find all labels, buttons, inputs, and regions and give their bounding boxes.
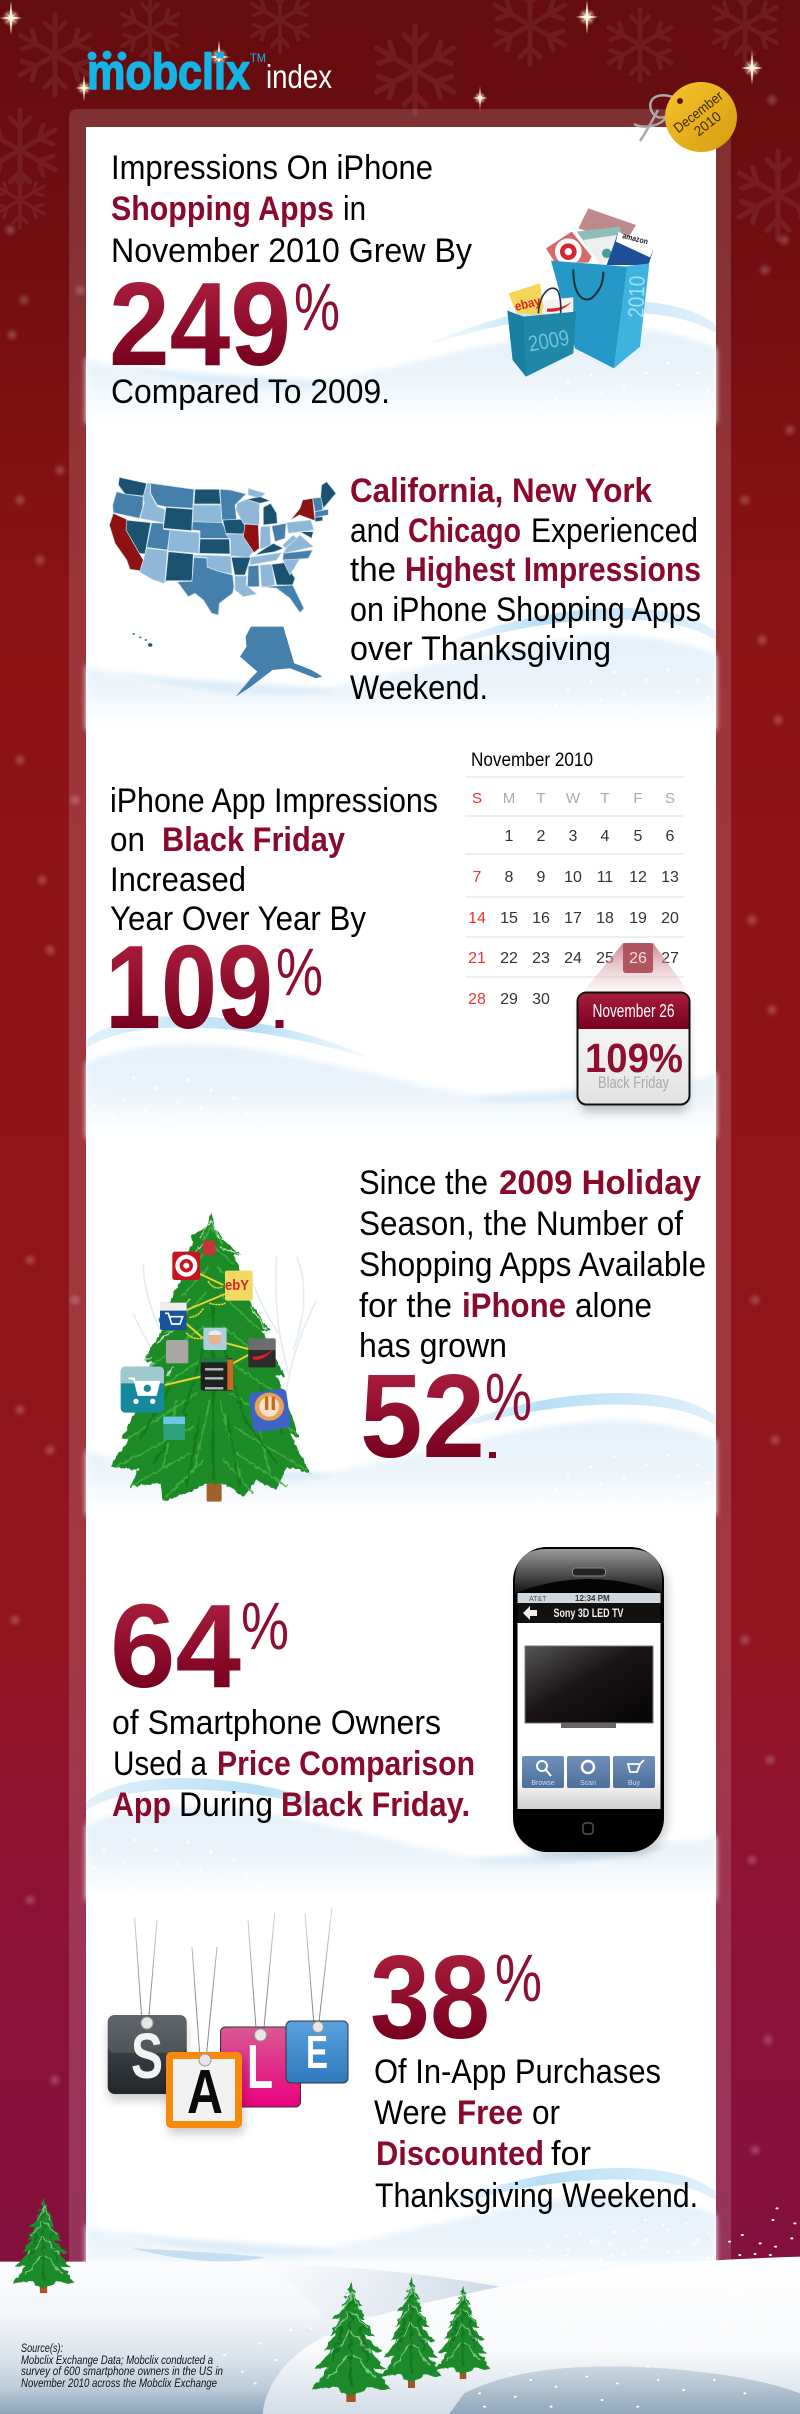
section 6 text: 38% in-app purchases: Thanksgiving Weekend. xyxy=(375,2177,698,2215)
phone: price comparison app: Sony 3D LED TV xyxy=(554,1606,624,1620)
calendar: November 2010: 21 xyxy=(468,950,486,967)
section 5 text: 64% price comparison: During xyxy=(179,1786,273,1824)
calendar: November 2010: 14 xyxy=(468,910,486,927)
callout: November 26 109% Black Friday: Black Friday xyxy=(598,1073,669,1092)
calendar: November 2010: 29 xyxy=(500,991,518,1008)
icon: SALE hanging tags: L xyxy=(247,2033,273,2102)
section 6 text: 38% in-app purchases: Free xyxy=(457,2094,523,2132)
section 5 text: 64% price comparison: % xyxy=(241,1589,289,1664)
section 4 text: 52% apps growth xyxy=(359,1164,706,1483)
phone: price comparison app: 12:34 PM xyxy=(575,1594,610,1603)
section 5 text: 64% price comparison: of Smartphone Owners xyxy=(112,1704,441,1742)
section 3 text: Black Friday 109%: Increased xyxy=(110,861,246,899)
calendar: November 2010: W xyxy=(566,790,581,807)
section 2 text: top states xyxy=(350,472,701,707)
tag: December 2010 xyxy=(634,82,737,152)
label: ebay ornament: ebY xyxy=(225,1277,249,1294)
section 4 text: 52% apps growth: Season, the Number of xyxy=(359,1205,684,1243)
section 3 text: Black Friday 109%: 109 xyxy=(105,921,273,1054)
panel frame xyxy=(69,109,731,2280)
map: United States xyxy=(109,477,336,697)
calendar: November 2010: 27 xyxy=(661,950,679,967)
section 5 text: 64% price comparison: Black Friday. xyxy=(281,1786,470,1824)
section 3 text: Black Friday 109%: on xyxy=(110,821,145,859)
callout: November 26 109% Black Friday: November 26 xyxy=(592,1001,674,1021)
section 4 text: 52% apps growth: 52 xyxy=(360,1350,485,1483)
calendar: November 2010: 13 xyxy=(661,869,679,886)
calendar: November 2010: F xyxy=(633,790,643,807)
section 4 text: 52% apps growth: iPhone xyxy=(462,1287,566,1325)
calendar: November 2010: 16 xyxy=(532,910,550,927)
icon: shopping bags xyxy=(507,208,653,377)
calendar: November 2010: 17 xyxy=(564,910,582,927)
tag: December 2010: December xyxy=(670,87,726,136)
icon: SALE hanging tags xyxy=(108,1907,348,2134)
section 3 text: Black Friday 109% xyxy=(105,782,438,1054)
section 1 text: impressions 249%: Shopping Apps xyxy=(111,190,334,228)
source note: Mobclix Exchange Data; Mobclix conducted a xyxy=(21,2355,213,2367)
section 2 text: top states: California, New York xyxy=(350,472,652,510)
section 6 text: 38% in-app purchases: Were xyxy=(374,2094,447,2132)
icon: shopping bags: ebay xyxy=(513,293,543,314)
section 4 text: 52% apps growth: % xyxy=(485,1360,532,1435)
section 5 text: 64% price comparison: App xyxy=(112,1786,171,1824)
source note: Source(s): xyxy=(21,2343,63,2355)
section 2 text: top states: over Thanksgiving xyxy=(350,630,611,668)
section 5 text: 64% price comparison: 64 xyxy=(110,1580,241,1713)
calendar: November 2010: 10 xyxy=(564,869,582,886)
section 1 text: impressions 249%: Compared To 2009. xyxy=(111,373,390,411)
calendar: November 2010: 7 xyxy=(473,869,482,886)
calendar: November 2010: 8 xyxy=(505,869,514,886)
calendar: November 2010: 22 xyxy=(500,950,518,967)
section 6 text: 38% in-app purchases xyxy=(370,1931,698,2215)
calendar: November 2010 xyxy=(466,750,689,1008)
section 1 text: impressions 249%: in xyxy=(343,190,366,228)
calendar: November 2010: November 2010 xyxy=(471,750,593,771)
logo: mobclix index: index xyxy=(266,58,332,95)
phone: price comparison app: Scan xyxy=(580,1780,596,1787)
calendar: November 2010: 3 xyxy=(569,828,578,845)
icon: shopping bags: 2009 xyxy=(526,325,571,356)
calendar: November 2010: S xyxy=(472,790,482,807)
section 1 text: impressions 249%: November 2010 Grew By xyxy=(111,232,472,270)
snow waves xyxy=(86,301,716,2290)
section 6 text: 38% in-app purchases: % xyxy=(495,1941,542,2016)
section 4 text: 52% apps growth: has grown xyxy=(359,1327,507,1365)
calendar: November 2010: 23 xyxy=(532,950,550,967)
section 1 text: impressions 249% xyxy=(109,149,472,411)
section 6 text: 38% in-app purchases: Of In-App Purchases xyxy=(374,2053,661,2091)
calendar: November 2010: 11 xyxy=(597,869,613,886)
bottom snow landscape xyxy=(0,2208,800,2414)
icon: SALE hanging tags: E xyxy=(306,2026,328,2078)
section 3 text: Black Friday 109%: Black Friday xyxy=(162,821,345,859)
calendar: November 2010: T xyxy=(600,790,610,807)
section 3 text: Black Friday 109%: Year Over Year By xyxy=(110,900,366,938)
calendar: November 2010: 30 xyxy=(532,991,550,1008)
calendar: November 2010: 2 xyxy=(537,828,546,845)
calendar: November 2010: S xyxy=(665,790,675,807)
calendar: November 2010: 9 xyxy=(537,869,546,886)
phone: price comparison app: AT&T xyxy=(529,1596,547,1603)
section 1 text: impressions 249%: Impressions On iPhone xyxy=(111,149,433,187)
calendar: November 2010: 1 xyxy=(505,828,514,845)
phone: price comparison app xyxy=(513,1547,668,1855)
section 6 text: 38% in-app purchases: 38 xyxy=(370,1931,490,2064)
section 4 text: 52% apps growth: Shopping Apps Available xyxy=(359,1246,706,1284)
calendar: November 2010: 26 xyxy=(629,950,647,967)
calendar: November 2010: 15 xyxy=(500,910,518,927)
section 3 text: Black Friday 109%: iPhone App Impressions xyxy=(110,782,438,820)
tag: December 2010: 2010 xyxy=(691,108,724,139)
calendar: November 2010: 25 xyxy=(596,950,614,967)
calendar: November 2010: 6 xyxy=(666,828,675,845)
section 5 text: 64% price comparison: Price Comparison xyxy=(217,1745,475,1783)
calendar: November 2010: M xyxy=(503,790,515,807)
logo: mobclix index: mobclix xyxy=(87,44,250,100)
icon: SALE hanging tags: S xyxy=(131,2020,163,2092)
section 2 text: top states: Highest Impressions xyxy=(405,551,701,589)
calendar: November 2010: 24 xyxy=(564,950,582,967)
section 3 text: Black Friday 109%: % xyxy=(276,935,323,1010)
calendar: November 2010: T xyxy=(536,790,546,807)
phone: price comparison app: Buy xyxy=(628,1780,641,1787)
trees: three firs xyxy=(312,2277,490,2402)
calendar: November 2010: 20 xyxy=(661,910,679,927)
tree: left of frame xyxy=(13,2198,74,2293)
section 2 text: top states: Experienced xyxy=(531,512,698,550)
calendar: November 2010: 12 xyxy=(629,869,647,886)
section 6 text: 38% in-app purchases: for xyxy=(551,2135,591,2173)
logo: mobclix index: TM xyxy=(250,51,266,65)
source note: November 2010 across the Mobclix Exchange xyxy=(21,2378,217,2390)
white content panel xyxy=(86,127,716,2277)
icon: Christmas tree with app ornaments xyxy=(110,1212,317,1502)
icon: shopping bags: amazon xyxy=(622,231,649,246)
section 4 text: 52% apps growth: for the xyxy=(359,1287,452,1325)
section 2 text: top states: Chicago xyxy=(408,512,521,550)
phone: price comparison app: Browse xyxy=(531,1780,555,1787)
calendar: November 2010: 19 xyxy=(629,910,647,927)
calendar: November 2010: 4 xyxy=(601,828,610,845)
section 6 text: 38% in-app purchases: Discounted xyxy=(376,2135,544,2173)
icon: SALE hanging tags: A xyxy=(187,2058,223,2127)
calendar: November 2010: 5 xyxy=(634,828,643,845)
section 2 text: top states: Weekend. xyxy=(350,669,488,707)
callout: November 26 109% Black Friday xyxy=(578,992,690,1112)
section 2 text: top states: and xyxy=(350,512,400,550)
section 5 text: 64% price comparison xyxy=(110,1580,475,1824)
section 5 text: 64% price comparison: Used a xyxy=(113,1745,207,1783)
section 4 text: 52% apps growth: 2009 Holiday xyxy=(499,1164,701,1202)
source note: survey of 600 smartphone owners in the US in xyxy=(21,2366,223,2378)
section 1 text: impressions 249%: % xyxy=(294,270,340,345)
section 2 text: top states: on iPhone Shopping Apps xyxy=(350,591,701,629)
source note xyxy=(21,2343,223,2390)
calendar: November 2010: 28 xyxy=(468,991,486,1008)
section 6 text: 38% in-app purchases: or xyxy=(532,2094,560,2132)
sparkling stars xyxy=(0,0,763,110)
section 1 text: impressions 249%: 249 xyxy=(109,258,291,391)
callout: November 26 109% Black Friday: 109% xyxy=(585,1035,683,1081)
section 2 text: top states: the xyxy=(350,551,396,589)
calendar: November 2010: 18 xyxy=(596,910,614,927)
section 4 text: 52% apps growth: alone xyxy=(575,1287,652,1325)
section 4 text: 52% apps growth: Since the xyxy=(359,1164,488,1202)
icon: shopping bags: 2010 xyxy=(623,275,650,318)
